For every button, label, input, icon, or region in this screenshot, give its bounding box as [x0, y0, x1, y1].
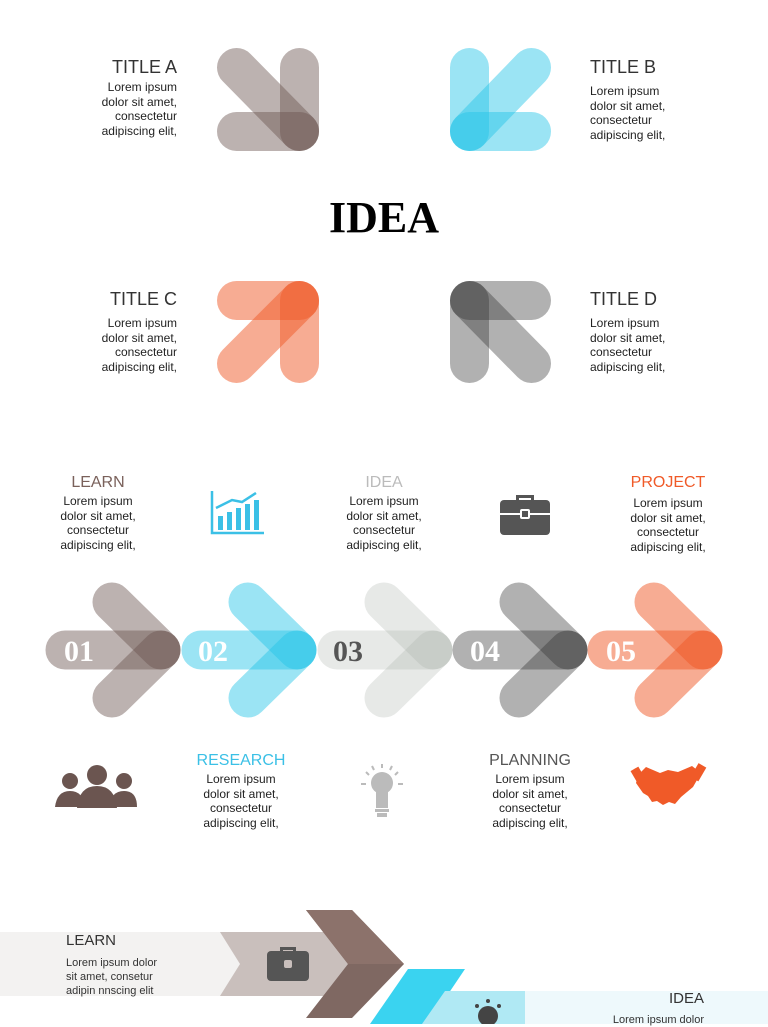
bottom learn text: LEARN: [66, 932, 116, 949]
research label: [197, 752, 285, 830]
title D text: dolor sit amet,: [590, 330, 665, 344]
process arrow 03: 03: [333, 635, 363, 668]
research label: Lorem ipsum: [206, 772, 276, 786]
planning label: adipiscing elit,: [492, 816, 568, 830]
icon: briefcase small: [267, 947, 309, 981]
research label: adipiscing elit,: [203, 816, 279, 830]
title D text: adipiscing elit,: [590, 360, 665, 374]
process arrow 04: [470, 602, 568, 698]
learn label: consectetur: [67, 523, 129, 537]
research label: RESEARCH: [197, 752, 285, 769]
process arrow 01: 01: [64, 635, 94, 668]
title A text: [102, 57, 177, 138]
process arrow 02: 02: [198, 635, 228, 668]
process arrow 05: [606, 602, 703, 698]
bottom idea text: [613, 990, 704, 1026]
icon: handshake: [631, 763, 706, 805]
planning label: PLANNING: [489, 752, 571, 769]
title A text: consectetur: [115, 109, 177, 123]
title A text: adipiscing elit,: [102, 124, 177, 138]
title D text: TITLE D: [590, 289, 657, 309]
bottom learn text: [66, 932, 157, 997]
title A text: TITLE A: [112, 57, 177, 77]
icon: arrow D: [470, 300, 532, 364]
research label: dolor sit amet,: [203, 786, 279, 800]
project label: dolor sit amet,: [630, 510, 706, 524]
planning label: consectetur: [499, 801, 561, 815]
process arrow 05: 05: [606, 635, 636, 668]
title D text: consectetur: [590, 345, 652, 359]
planning label: dolor sit amet,: [492, 786, 568, 800]
title B text: consectetur: [590, 113, 652, 127]
title B text: dolor sit amet,: [590, 98, 665, 112]
icon: briefcase: [500, 495, 550, 535]
icon: arrow B: [470, 68, 532, 132]
title A text: Lorem ipsum: [108, 80, 177, 94]
bottom learn text: sit amet, consetur: [66, 971, 153, 983]
title D text: Lorem ipsum: [590, 316, 659, 330]
bottom idea text: IDEA: [669, 990, 704, 1007]
icon: gear bulb: [475, 999, 501, 1026]
title A text: dolor sit amet,: [102, 94, 177, 108]
learn label: LEARN: [71, 474, 125, 491]
bottom learn text: adipin nnscing elit: [66, 985, 153, 997]
title C text: TITLE C: [110, 289, 177, 309]
idea label: Lorem ipsum: [349, 494, 419, 508]
process arrow 02: [198, 602, 297, 698]
icon: bar chart: [212, 491, 264, 533]
title C text: consectetur: [115, 345, 177, 359]
planning label: [489, 752, 571, 830]
project label: [630, 474, 706, 554]
idea label: adipiscing elit,: [346, 538, 422, 552]
idea label: IDEA: [365, 474, 403, 491]
icon: arrow A: [236, 68, 300, 132]
title C text: dolor sit amet,: [102, 330, 177, 344]
main title: IDEA: [329, 193, 439, 242]
process arrow 01: [64, 602, 161, 698]
learn label: adipiscing elit,: [60, 538, 136, 552]
project label: consectetur: [637, 525, 699, 539]
planning label: Lorem ipsum: [495, 772, 565, 786]
title B text: Lorem ipsum: [590, 84, 659, 98]
bottom idea text: Lorem ipsum dolor: [613, 1014, 704, 1026]
title C text: [102, 289, 177, 374]
title D text: [590, 289, 665, 374]
idea label: consectetur: [353, 523, 415, 537]
idea label: [346, 474, 422, 552]
project label: adipiscing elit,: [630, 540, 706, 554]
title C text: Lorem ipsum: [108, 316, 177, 330]
research label: consectetur: [210, 801, 272, 815]
title B text: TITLE B: [590, 57, 656, 77]
title B text: adipiscing elit,: [590, 128, 665, 142]
learn label: Lorem ipsum: [63, 494, 133, 508]
icon: arrow C: [236, 300, 300, 364]
idea label: dolor sit amet,: [346, 508, 422, 522]
icon: light bulb: [361, 764, 403, 817]
project label: Lorem ipsum: [633, 496, 703, 510]
learn label: [60, 474, 136, 552]
title B text: [590, 57, 665, 142]
bottom band: learn: [0, 910, 404, 1018]
title C text: adipiscing elit,: [102, 360, 177, 374]
bottom learn text: Lorem ipsum dolor: [66, 957, 157, 969]
learn label: dolor sit amet,: [60, 508, 136, 522]
icon: people: [55, 765, 137, 808]
process arrow 03: [333, 602, 433, 698]
process arrow 04: 04: [470, 635, 500, 668]
bottom band: idea: [370, 969, 768, 1024]
project label: PROJECT: [631, 474, 705, 491]
